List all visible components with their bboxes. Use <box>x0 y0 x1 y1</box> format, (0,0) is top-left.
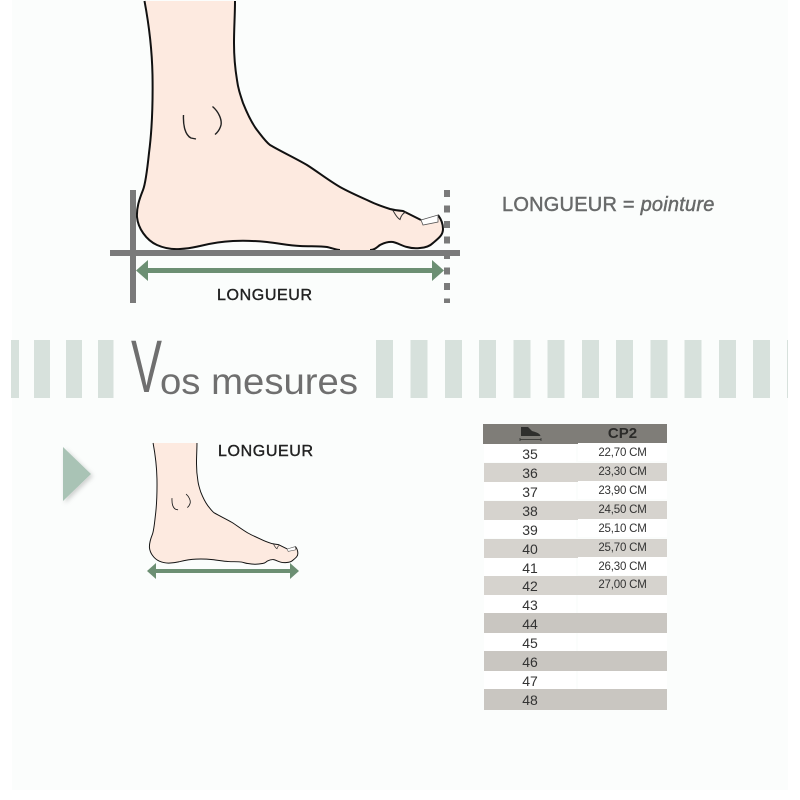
icon: small foot outline <box>149 443 298 564</box>
row 38: 38 <box>522 502 538 518</box>
row 36 <box>484 462 667 482</box>
row 36: 23,30 CM <box>598 466 647 478</box>
arrow: small length measure <box>147 563 299 579</box>
row 35: 35 <box>522 446 538 462</box>
label: longueur small: LONGUEUR <box>218 443 313 460</box>
toe guide dashed line <box>444 190 450 303</box>
illustration: large foot with measurement guides <box>110 0 460 304</box>
row 41: 41 <box>522 560 538 576</box>
heel guide line <box>130 190 136 303</box>
band: decorative stripes and title <box>11 330 788 408</box>
row 37 <box>522 481 667 500</box>
table header <box>483 424 667 444</box>
row 37: 37 <box>522 484 538 500</box>
text: longueur equals pointure: LONGUEUR = pointure <box>502 194 715 216</box>
row 41: 26,30 CM <box>598 561 647 573</box>
row 39: 25,10 CM <box>598 523 647 535</box>
row 36: 36 <box>522 464 538 480</box>
label: longueur: LONGUEUR <box>217 287 312 304</box>
title: os mesures <box>160 361 358 402</box>
row 48 <box>484 689 667 710</box>
row 44: 44 <box>522 616 538 632</box>
row 44 <box>484 613 667 633</box>
row 39: 39 <box>522 522 538 538</box>
row 47: 47 <box>522 673 538 689</box>
row 40 <box>484 538 667 558</box>
row 42: 27,00 CM <box>598 579 647 591</box>
row 40: 40 <box>522 540 538 556</box>
row 46 <box>484 651 667 671</box>
row 35 <box>522 443 667 462</box>
row 46: 46 <box>522 654 538 670</box>
illustration: small foot with arrow <box>147 442 299 579</box>
row 41 <box>522 557 667 576</box>
row 35: 22,70 CM <box>598 447 647 459</box>
row 43: 43 <box>522 597 538 613</box>
row 38: 24,50 CM <box>598 504 647 516</box>
ground line <box>110 250 460 256</box>
arrow: length measure <box>136 260 444 281</box>
row 37: 23,90 CM <box>598 485 647 497</box>
row 42: 42 <box>522 578 538 594</box>
row 42 <box>484 576 667 595</box>
title <box>131 325 358 408</box>
row 38 <box>484 500 667 520</box>
icon: pointer triangle <box>63 447 94 502</box>
icon: sneaker <box>520 427 542 441</box>
icon: large foot outline <box>137 1 443 250</box>
row 40: 25,70 CM <box>598 542 647 554</box>
row 39 <box>522 519 667 538</box>
row 45: 45 <box>522 635 538 651</box>
row 48: 48 <box>522 692 538 708</box>
heading: CP2: CP2 <box>608 425 637 442</box>
